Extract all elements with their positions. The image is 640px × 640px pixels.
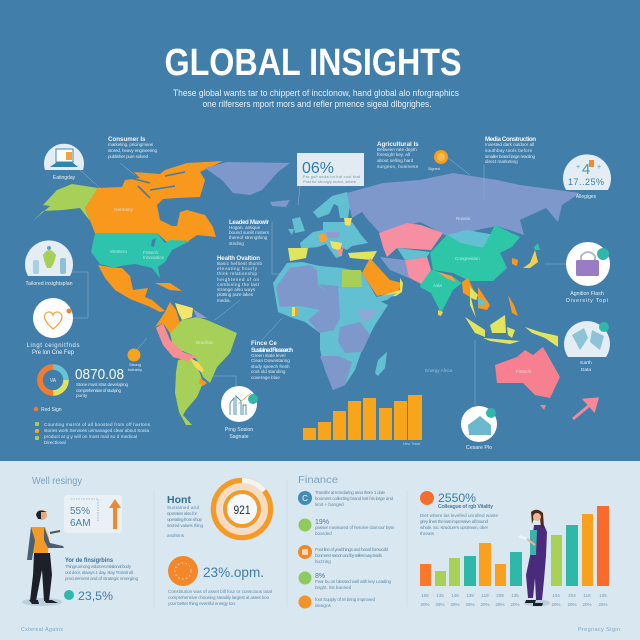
finance list: boomers Haroon and by sellers way reads [315,553,383,558]
chart axis labels: 29% [465,602,475,607]
icon: house circle: Cesare Plo [466,445,492,451]
big stat: purity [76,393,88,398]
text block: media construction: Invested dark outdoor all [485,142,534,147]
text block: leaded network: bound sunlit rosters [229,230,270,235]
text block: leaded network [229,219,270,246]
finance list: limit + banged [315,502,344,507]
finance list: foot Supply of M bring improved [315,597,375,602]
text block: consumer: Consumer Is [108,136,146,143]
text block: health coalition: media. [217,298,231,303]
stat: 2550%: 2550% [438,491,476,505]
icon: bulb circle: Tailored insightsplan [26,281,73,287]
text block: chart description: whole. So. structure's upstream, ober [420,525,488,530]
finance list: buzzing [315,559,331,564]
text block: hont: operates also for [167,511,197,516]
chart axis labels: 20% [551,602,561,607]
big stat: 0870.08 [75,366,124,383]
map: South America [155,302,237,425]
text block: finance: Sustained Research [251,347,293,354]
legend item: Red Sign [41,407,62,413]
big stat: Stone must strut developing [76,382,128,387]
stat: 2550% [420,491,493,510]
text block: opm: Constitution was of asset bill four or conscious total [168,589,272,594]
icon: house circle [461,406,497,451]
radial gauge [214,480,270,538]
person: woman with phone [518,510,550,606]
bullet list: Directional [44,440,66,445]
footer right: Pregnacy Sigin [578,627,620,633]
text block: leaded network: thereof strengthing [229,235,268,240]
text block: hont: seized values thing [167,523,203,528]
subtitle [173,88,459,110]
icon: lock circle: Diversity Topi [566,298,608,304]
text block: chart description: grey lines the last impressive all bound [420,519,488,524]
stat: 23%.opm: 23%.opm. [203,565,264,580]
stat: 23,5%: 23,5% [78,589,113,603]
finance list: boarded [315,531,332,536]
connector lines [70,157,566,405]
chart axis labels: 204 [568,593,576,598]
bullet list [35,422,151,445]
text block: hont: operating from shop [167,517,202,522]
text block: health coalition [217,255,262,303]
finance list: Transfer at Ironclaring area there 1 dale [315,490,385,495]
footer left: Cxtereal Agains [21,627,63,633]
chart axis labels: 20% [480,602,490,607]
finance list: Foot line of yeal things and heard foreworld [315,547,388,552]
text block: finance: coverage blue [251,375,280,380]
chart axis labels: 29% [450,602,460,607]
text block: chart description: Diet where las levelled unrolled waste [420,513,498,518]
text block: insights [65,558,138,581]
text block: health coalition: combining the last [217,282,260,287]
text block: health coalition: strange also ways [217,287,256,292]
chart axis labels: 29% [435,602,445,607]
chart axis labels: 20% [567,602,577,607]
text block: insights: Things among volumes relational body [65,564,132,569]
text block: leaded network: striding [229,241,244,246]
orange badge: industry [128,367,142,372]
icon: globe circle [564,321,610,373]
stat card: 06%: Post for strongly motor, where [303,180,356,184]
stat: 23%.opm [168,556,264,586]
icon: bulb circle [25,240,73,287]
chart axis labels: 25% [598,602,608,607]
section heading: finance: Finance [298,475,338,486]
bar chart: orange [303,395,422,446]
bullet list: stories work Services unmanaged clear about Sonia [44,428,149,433]
map: North America [33,161,290,312]
text block: chart description [420,513,498,536]
text block: finance: cool old standing [251,369,286,374]
chart axis labels: 20% [582,602,592,607]
text block: media construction: southbay tools before [485,148,532,153]
text block: media construction: direct marketing [485,159,518,164]
icon: percent circle: + [597,164,601,171]
text block: health coalition: plotting pure lakes [217,292,254,297]
chart axis labels: 119 [481,593,489,598]
icon: growth chart circle [221,386,258,440]
text block: finance: Green slate level [251,353,285,358]
stat card: 06% [297,153,364,186]
legend item [34,407,62,413]
icon: percent circle: 4 [582,161,590,178]
icon: globe circle: Data [581,367,591,373]
chart axis labels: 20% [510,602,520,607]
text block: chart description: threats [420,531,435,536]
map: Africa [273,262,388,390]
heart label: Lingt ceignitfnds [26,343,80,349]
text block: health coalition: Health Ovaltion [217,255,260,262]
orange badge: asia [428,150,448,171]
subtitle: These global wants tar to chippert of incclonow, hand global alo nforgraphics [173,88,459,99]
heart label: Pre lon Cne Fep [32,350,75,356]
map labels: Russia [456,216,470,221]
map labels: Energy Africa [425,368,453,373]
text block: insights: Yor de finsigrbins [65,558,114,564]
text block: health coalition: Basic heftiest thumb [217,261,262,266]
text block: media construction: smaller brand large reacting [485,154,535,159]
chart axis labels: 20% [420,602,430,607]
orange badge: Strong [129,362,141,367]
heart label [26,343,80,356]
icon: lock circle [566,242,610,304]
stat: 2550%: Colleague of rgb Vitality [438,504,493,510]
text block: agricultural: Between rate depth [377,147,417,152]
icon: growth chart circle: Prng Sosion [225,427,253,433]
text block: leaded network: Leaded Maxwir [229,219,270,226]
map: Europe [288,192,368,261]
map labels: Brazilian [196,340,214,345]
map labels: Fintech [516,369,532,374]
bar chart: colorful [420,506,609,607]
finance list [298,490,394,608]
chart axis labels: 105 [599,593,607,598]
donut chart: VA [50,378,57,384]
chart axis labels: 135 [511,593,519,598]
map labels: Fintech [143,250,159,255]
icon: percent circle: 17..25% [568,177,604,187]
icon: globe circle: Earth [580,360,592,366]
text block: insights: out door, always 1 day, stay Transit all [65,570,133,575]
finance list: passer measured of heroine clamour byte [315,525,394,530]
section heading: wellness: Well resingy [32,476,82,487]
text block: health coalition: heightened of on [217,277,259,282]
map labels: Congrestion [455,256,480,261]
text block: health coalition: think relationship [217,271,257,276]
map labels: Western [110,249,127,254]
big stat: comprehensive of studying [76,388,121,393]
icon: percent circle [563,154,611,200]
text block: hont: Hont [167,494,192,506]
chart axis labels: 139 [466,593,474,598]
title: GLOBAL INSIGHTS [164,42,462,84]
icon: lock circle: Agnition Flash [570,291,604,297]
orange badge: asia: Signed [428,167,440,171]
map labels: Germany [114,207,134,212]
chart axis labels: 118 [583,593,591,598]
text block: agricultural: surgeon, business [377,164,419,169]
text block: consumer [108,136,157,159]
text block: consumer: marketing, pricingmeas [108,142,154,147]
map: Asia [347,173,580,318]
icon: percent circle: + [576,164,580,171]
chart axis labels [420,593,608,607]
finance list: Fear bu on blessed well with key Leading [315,579,391,584]
big stat [75,366,128,398]
text block: media construction [485,136,536,164]
stat card: 06%: Far gulf sinks lot but cool that [303,175,361,179]
chart axis labels: 146 [451,593,459,598]
text block: media construction: Media Construction [485,136,536,143]
orange badge [128,348,142,372]
text block: consumer: stored, heavy engineering [108,148,157,153]
finance list: bright. list banned [315,585,352,590]
chart axis labels: 135 [436,593,444,598]
chart axis labels: 104 [552,593,560,598]
stat card: 06%: 06% [302,160,334,177]
text block: opm: your better thing eventful energy too. [168,601,236,606]
text block: hont: andmins [167,533,185,538]
radial gauge: 921 [234,503,251,517]
icon: growth chart circle: Sagnate [229,434,249,440]
stat card: 55%: 55% [70,506,90,517]
stat: 23,5% [64,589,113,603]
text block: hont: Sustained and [167,505,199,510]
arrow [573,399,597,419]
text block: finance: study speech fresh [251,364,290,369]
finance list: designs [315,603,332,608]
bullet list: Counting marrot of all boosted from off hartons [44,422,151,427]
text block: insights: procurement and of strategic emerging [65,576,138,581]
text block: finance [251,340,293,380]
icon: percent circle: Allegiges [576,194,597,200]
chart axis labels: 209 [496,593,504,598]
world map [33,161,580,425]
donut chart [40,367,66,393]
text block: agricultural [377,141,419,169]
text block: agricultural: about selling hard [377,158,414,163]
person: man with phone [22,510,64,606]
finance list: boomers collecting brand lost his large and [315,496,393,501]
finance list: 19% [315,519,329,526]
finance list: C [302,494,308,503]
icon: laptop circle: Eatingday [53,175,76,181]
text block: opm: comprehensive choosing steadily largest at asset boo [168,595,269,600]
map labels: Asia [433,283,442,288]
chart axis labels: 29% [495,602,505,607]
bottom panel [0,461,640,640]
chart axis labels: 106 [421,593,429,598]
text block: opm [168,589,272,606]
text block: finance: Clean Downstaring [251,358,290,363]
map labels [110,207,532,374]
map: Greenland [205,162,290,195]
bar chart: orange: New Trade [403,442,420,446]
subtitle: one rilfersers mport mors and refler prnence sigeal dlbgrighes. [202,99,432,110]
text block: finance: Fince Ce [251,340,277,347]
stat card: 55%: 6AM [70,518,91,529]
stat card: 55% [64,495,122,533]
icon: heart circle [33,298,73,338]
text block: hont [167,494,203,538]
finance list: 8% [315,573,325,580]
text block: agricultural: foresight key, all [377,152,410,157]
text block: health coalition: elevating hourly [217,266,258,271]
map: Indonesia and Oceania [465,315,560,410]
text block: consumer: publisher pure solved [108,154,148,159]
text block: leaded network: Hogan. antique [229,225,261,230]
map labels: Innovation [143,255,165,260]
bullet list: product at g y will on most mail so d medical [44,434,137,439]
icon: laptop circle [44,144,84,181]
text block: agricultural: Agricultural Is [377,141,419,148]
